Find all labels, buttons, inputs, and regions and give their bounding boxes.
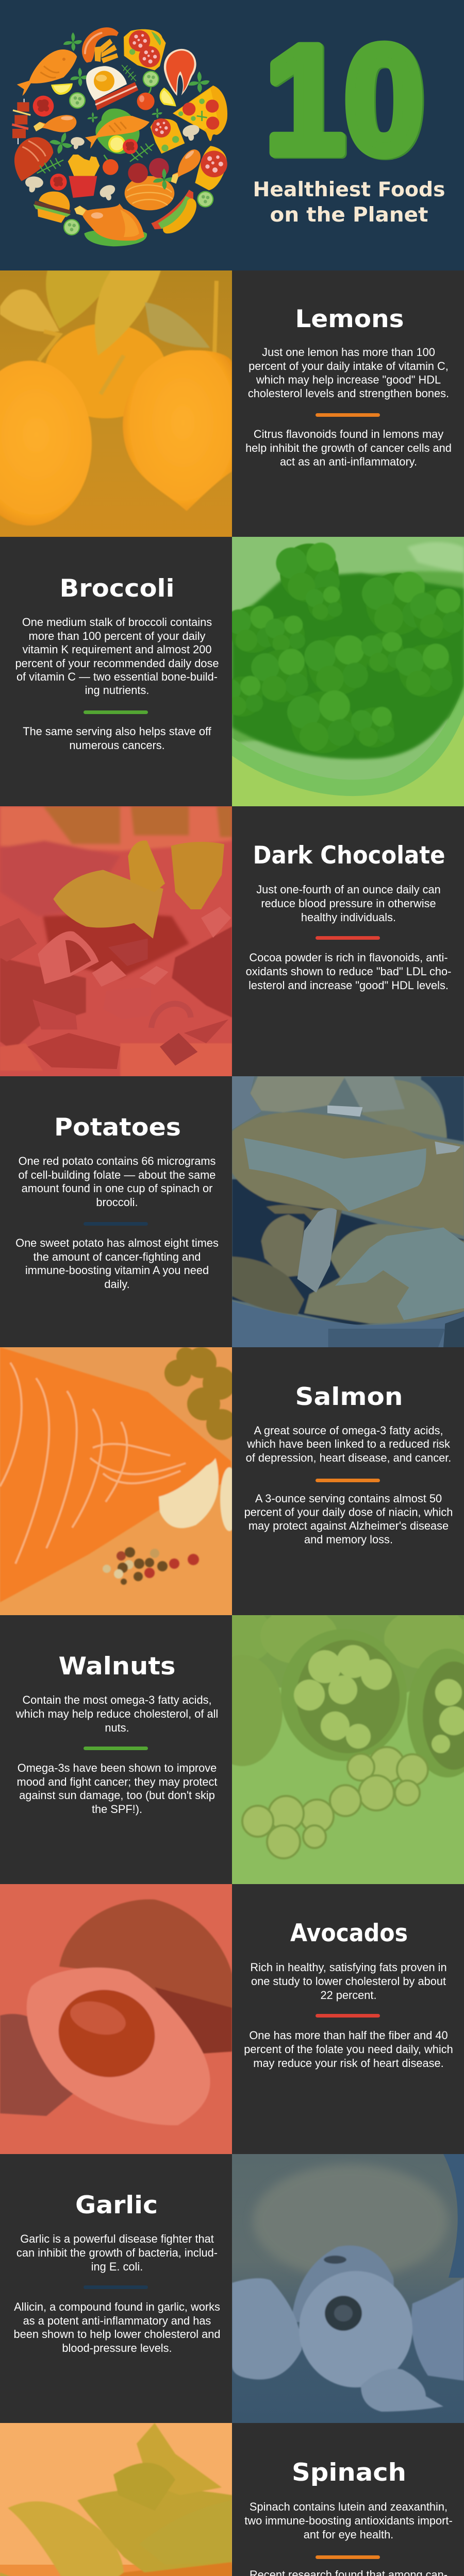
paragraph: A great source of omega-3 fatty acids, bbox=[254, 1424, 443, 1437]
paragraph: One sweet potato has almost eight times bbox=[15, 1236, 219, 1249]
icon: roast chicken bbox=[74, 204, 147, 246]
divider bbox=[316, 1479, 380, 1482]
icon: herb sprig bbox=[152, 108, 162, 118]
big number 10: 10 bbox=[265, 14, 424, 185]
paragraph: Just one-fourth of an ounce daily can bbox=[256, 883, 441, 896]
paragraph: as a potent anti-inflammatory and has bbox=[23, 2314, 211, 2327]
divider bbox=[84, 1747, 148, 1750]
divider bbox=[316, 936, 380, 940]
paragraph: may reduce your risk of heart disease. bbox=[253, 2057, 444, 2070]
paragraph: One red potato contains 66 micrograms bbox=[19, 1155, 216, 1167]
paragraph: mood and fight cancer; they may protect bbox=[17, 1775, 217, 1788]
divider bbox=[84, 2285, 148, 2289]
paragraph: help inhibit the growth of cancer cells and bbox=[245, 442, 452, 454]
paragraph: percent of the folate you need daily, which bbox=[244, 2043, 453, 2056]
heading: Broccoli bbox=[60, 574, 174, 603]
paragraph: more than 100 percent of your daily bbox=[29, 630, 206, 642]
title: on the Planet bbox=[270, 204, 428, 227]
panel: dark chocolate bbox=[0, 806, 464, 1076]
paragraph: act as an anti-inflammatory. bbox=[280, 455, 417, 468]
illustration: circle of foods bbox=[12, 27, 227, 246]
icon: bacon bbox=[95, 82, 138, 110]
paragraph: cholesterol levels and strengthen bones. bbox=[248, 387, 449, 400]
paragraph: Cocoa powder is rich in flavonoids, anti- bbox=[249, 951, 448, 964]
text panel bbox=[0, 1076, 232, 1347]
icon: meat bbox=[14, 137, 53, 181]
icon: chicken leg bbox=[164, 146, 205, 186]
icon: sausage bbox=[82, 27, 119, 63]
icon: pepperoni toast bbox=[151, 118, 185, 154]
paragraph: Allicin, a compound found in garlic, works bbox=[14, 2300, 220, 2313]
paragraph: which have been linked to a reduced risk bbox=[246, 1437, 450, 1450]
paragraph: Contain the most omega-3 fatty acids, bbox=[22, 1693, 212, 1706]
paragraph: which may help reduce cholesterol, of all bbox=[15, 1707, 218, 1720]
icon: salmon steak bbox=[164, 49, 196, 96]
header bbox=[11, 14, 445, 246]
title: Healthiest Foods bbox=[253, 178, 445, 201]
text panel bbox=[232, 1884, 464, 2154]
icon: lemon wedge bbox=[160, 88, 176, 107]
paragraph: A 3-ounce serving contains almost 50 bbox=[255, 1492, 442, 1505]
paragraph: vitamin K requirement and almost 200 bbox=[22, 643, 212, 656]
paragraph: Citrus flavonoids found in lemons may bbox=[254, 428, 443, 440]
panel: potatoes bbox=[0, 1076, 464, 1347]
photo: broccoli bbox=[232, 537, 464, 806]
heading: Walnuts bbox=[59, 1652, 175, 1681]
paragraph: broccoli. bbox=[96, 1196, 138, 1209]
photo: dark chocolate bbox=[0, 806, 232, 1076]
divider bbox=[316, 2555, 380, 2559]
heading: Lemons bbox=[295, 305, 404, 333]
icon: mushroom bbox=[181, 123, 202, 143]
photo: spinach bbox=[0, 2423, 232, 2576]
paragraph: the amount of cancer-fighting and bbox=[34, 1250, 201, 1263]
text panel bbox=[232, 2423, 464, 2576]
divider bbox=[84, 710, 148, 714]
paragraph: the SPF!). bbox=[92, 1803, 142, 1816]
paragraph: can inhibit the growth of bacteria, includ- bbox=[16, 2246, 218, 2259]
panel: avocados bbox=[0, 1884, 464, 2154]
text panel bbox=[0, 537, 232, 806]
paragraph: immune-boosting vitamin A you need bbox=[25, 1264, 209, 1277]
icon: rosemary bbox=[37, 158, 63, 173]
text panel bbox=[0, 2154, 232, 2423]
panel: garlic bbox=[0, 2154, 464, 2423]
text panel bbox=[232, 806, 464, 1076]
icon: basil bbox=[70, 67, 89, 86]
icon: spaghetti and meatballs bbox=[125, 158, 174, 210]
paragraph: Rich in healthy, satisfying fats proven in bbox=[250, 1961, 447, 1974]
heading: Salmon bbox=[295, 1383, 403, 1411]
icon: tomato bbox=[103, 155, 119, 175]
icon: cheese sandwich bbox=[124, 29, 166, 71]
paragraph: percent of your recommended daily dose bbox=[15, 657, 219, 670]
paragraph: against sun damage, too (but don't skip bbox=[19, 1789, 215, 1802]
icon: fish on lettuce bbox=[85, 109, 150, 154]
paragraph: One has more than half the fiber and 40 bbox=[249, 2029, 448, 2042]
icon: herb sprig bbox=[87, 112, 98, 123]
paragraph: ing nutrients. bbox=[85, 684, 149, 697]
icon: cucumber bbox=[197, 191, 213, 208]
panel: broccoli bbox=[0, 537, 464, 806]
photo: potatoes bbox=[232, 1076, 464, 1347]
paragraph: been shown to help lower cholesterol and bbox=[13, 2328, 221, 2341]
paragraph: reduce blood pressure in otherwise bbox=[261, 897, 436, 910]
paragraph: The same serving also helps stave off bbox=[23, 725, 212, 738]
divider bbox=[316, 2014, 380, 2018]
paragraph: percent of your daily dose of niacin, which bbox=[244, 1505, 453, 1519]
icon: basil bbox=[188, 72, 209, 93]
paragraph: of cell-building folate — about the same bbox=[19, 1168, 216, 1181]
paragraph: daily. bbox=[104, 1278, 130, 1291]
paragraph: of vitamin C — two essential bone-build- bbox=[16, 670, 218, 683]
photo: avocados bbox=[0, 1884, 232, 2154]
icon: rosemary bbox=[122, 62, 137, 83]
icon: cucumber bbox=[143, 71, 159, 87]
icon: basil bbox=[63, 32, 82, 51]
icon: pepperoni bread bbox=[195, 146, 227, 190]
paragraph: ant for eye health. bbox=[304, 2528, 393, 2541]
panel: spinach bbox=[0, 2423, 464, 2576]
paragraph: healthy individuals. bbox=[301, 911, 396, 924]
paragraph: oxidants shown to reduce "bad" LDL cho- bbox=[246, 965, 451, 978]
icon: rosemary bbox=[127, 142, 156, 162]
icon: mushroom bbox=[71, 137, 85, 149]
paragraph: may protect against Alzheimer's disease bbox=[248, 1519, 449, 1532]
photo: walnuts bbox=[232, 1615, 464, 1884]
paragraph: lesterol and increase "good" HDL levels. bbox=[248, 979, 449, 992]
text panel bbox=[0, 1615, 232, 1884]
paragraph: percent of your daily intake of vitamin C, bbox=[248, 360, 449, 372]
paragraph: Omega-3s have been shown to improve bbox=[18, 1761, 217, 1774]
paragraph: and memory loss. bbox=[304, 1533, 393, 1546]
icon: fries bbox=[68, 155, 100, 198]
text panel bbox=[232, 270, 464, 537]
heading: Avocados bbox=[290, 1919, 408, 1947]
icon: potato wedges bbox=[94, 39, 118, 63]
paragraph: Just one lemon has more than 100 bbox=[262, 346, 435, 359]
paragraph: numerous cancers. bbox=[69, 739, 165, 752]
icon: basil bbox=[47, 128, 76, 157]
icon: mushroom bbox=[98, 182, 119, 203]
icon: fried egg bbox=[86, 66, 127, 100]
paragraph: Garlic is a powerful disease fighter that bbox=[20, 2232, 214, 2245]
panel: walnuts bbox=[0, 1615, 464, 1884]
icon: cucumber bbox=[63, 219, 80, 235]
panel: salmon bbox=[0, 1347, 464, 1615]
heading: Potatoes bbox=[54, 1113, 181, 1142]
heading: Garlic bbox=[75, 2191, 158, 2219]
paragraph: two immune-boosting antioxidants import- bbox=[244, 2514, 453, 2527]
icon: tomato bbox=[137, 87, 155, 110]
paragraph: Spinach contains lutein and zeaxanthin, bbox=[250, 2500, 448, 2513]
icon: burger bbox=[30, 187, 75, 225]
icon: hot dog bbox=[151, 190, 196, 233]
icon: skewer bbox=[12, 99, 30, 144]
icon: cucumber bbox=[69, 92, 86, 109]
heading: Dark Chocolate bbox=[253, 841, 445, 870]
paragraph: amount found in one cup of spinach or bbox=[22, 1182, 212, 1195]
icon: tomato slice bbox=[50, 174, 67, 191]
title bbox=[253, 178, 445, 227]
divider bbox=[316, 413, 380, 417]
text panel bbox=[232, 1347, 464, 1615]
icon: mushroom bbox=[25, 177, 43, 192]
heading: Spinach bbox=[292, 2459, 406, 2487]
paragraph: One medium stalk of broccoli contains bbox=[22, 616, 212, 629]
paragraph: of depression, heart disease, and cancer. bbox=[246, 1451, 451, 1464]
photo: salmon bbox=[0, 1347, 232, 1615]
paragraph: blood-pressure levels. bbox=[62, 2342, 172, 2354]
icon: lemon wedge bbox=[51, 83, 73, 95]
icon: whole fish bbox=[17, 49, 77, 96]
paragraph: nuts. bbox=[105, 1721, 129, 1734]
photo: garlic bbox=[232, 2154, 464, 2423]
panel: lemons bbox=[0, 270, 464, 537]
icon: tomato slice bbox=[33, 96, 54, 116]
paragraph: ing E. coli. bbox=[91, 2260, 143, 2273]
divider bbox=[84, 1222, 148, 1226]
paragraph: one study to lower cholesterol by about bbox=[251, 1975, 446, 1988]
icon: chicken leg bbox=[34, 115, 76, 132]
paragraph: 22 percent. bbox=[320, 1989, 377, 2002]
photo: lemons bbox=[0, 270, 232, 537]
paragraph: which may help increase "good" HDL bbox=[256, 373, 441, 386]
icon: pizza slice bbox=[173, 86, 227, 141]
